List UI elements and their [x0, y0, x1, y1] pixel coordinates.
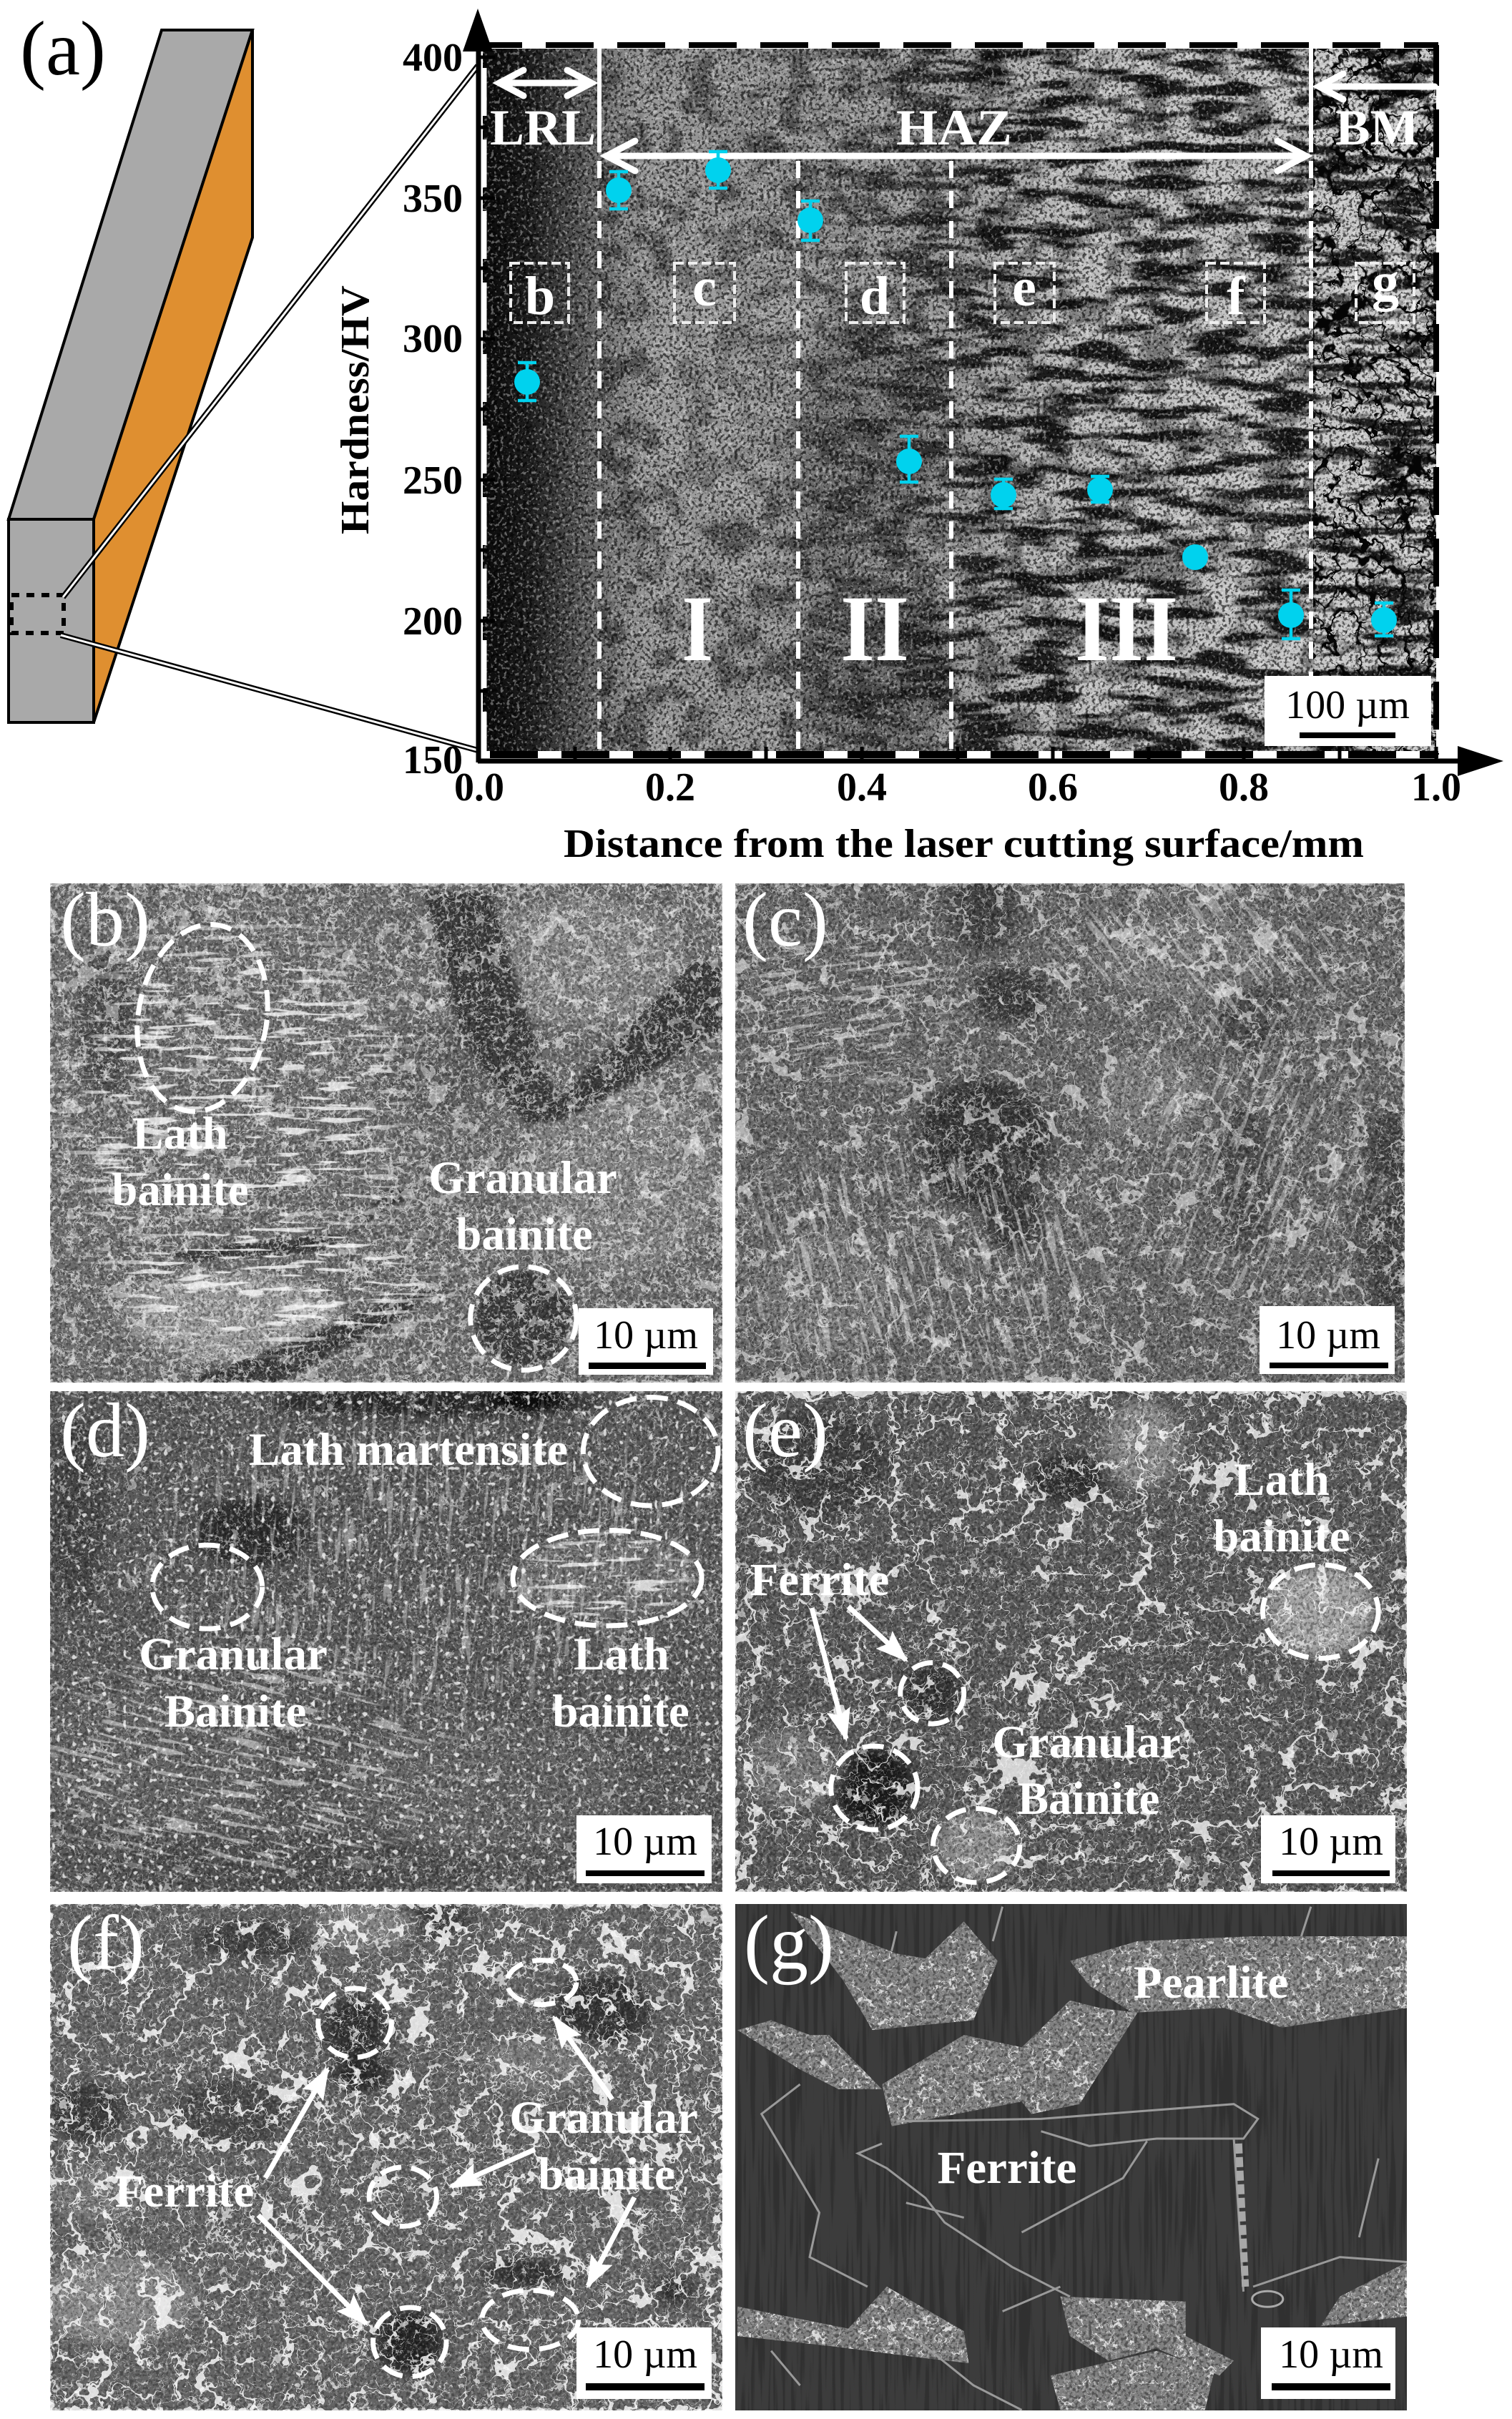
text granular bainite b: Granular	[428, 1152, 617, 1204]
dashed sample boxes: d	[860, 266, 890, 326]
text lath martensite: Lath martensite	[249, 1424, 568, 1476]
panel: hardness chart over optical micrograph	[333, 9, 1503, 866]
texture f	[39, 1901, 722, 2410]
x axis tick labels	[454, 765, 1461, 810]
texture c	[466, 557, 1512, 1578]
scale bar e: 10 µm	[1279, 1820, 1383, 1864]
dashed ellipses b	[128, 923, 576, 1370]
scale bar b	[579, 1308, 713, 1375]
dashed sample boxes: b	[525, 266, 555, 326]
y axis tick labels: 150	[403, 738, 463, 782]
text granular bainite f	[509, 2092, 698, 2200]
text granular bainite d: Granular	[139, 1629, 328, 1680]
zone dividers	[599, 49, 1311, 751]
label (d): (d)	[60, 1388, 150, 1473]
text lath bainite e	[1213, 1454, 1350, 1562]
y axis tick labels: 350	[403, 177, 463, 221]
texture g ferrite matrix	[735, 1904, 1407, 2410]
scale bar f	[576, 2327, 712, 2399]
x axis tick labels: 0.4	[837, 765, 887, 810]
dashed sample boxes: g	[1372, 252, 1399, 312]
roman numeral zones: III	[1075, 576, 1178, 681]
scale bar f: 10 µm	[593, 2332, 697, 2377]
text lath bainite d: Lath	[574, 1629, 669, 1680]
text lath bainite b	[112, 1108, 249, 1216]
x axis tick labels: 0.6	[1028, 765, 1078, 810]
text ferrite f: Ferrite	[115, 2166, 254, 2217]
x axis tick labels: 1.0	[1411, 765, 1461, 810]
label (f): (f)	[67, 1900, 144, 1986]
texture e	[735, 1391, 1407, 1892]
y axis tick labels: 200	[403, 599, 463, 644]
y axis tick labels: 300	[403, 317, 463, 361]
LRL double arrow	[499, 70, 591, 96]
grain boundaries	[762, 1907, 1408, 2410]
specimen side face	[94, 30, 252, 722]
HAZ double arrow	[607, 141, 1306, 171]
dashed ellipses e	[831, 1565, 1378, 1883]
scale bar 100 um: 100 µm	[1285, 683, 1410, 727]
zone labels	[490, 100, 1419, 156]
text granular bainite f: Granular	[509, 2092, 698, 2144]
x axis title: Distance from the laser cutting surface/mm	[564, 822, 1364, 866]
y axis tick labels: 400	[403, 36, 463, 80]
scale bar 100 um	[1265, 676, 1431, 746]
text granular bainite e: Granular	[992, 1717, 1181, 1768]
optical micrograph background	[483, 49, 1436, 758]
hardness data points	[514, 152, 1397, 639]
y axis title: Hardness/HV	[333, 285, 378, 534]
scale bar b: 10 µm	[594, 1313, 698, 1358]
y axis tick labels: 250	[403, 458, 463, 503]
zone labels: LRL	[490, 100, 596, 156]
scale bar d	[576, 1815, 712, 1883]
frame	[484, 45, 1438, 755]
scale bar d: 10 µm	[593, 1820, 697, 1864]
arrows f	[258, 2018, 634, 2324]
zone labels: BM	[1335, 100, 1419, 156]
text granular bainite d: Bainite	[165, 1686, 306, 1737]
x axis tick labels: 0.0	[454, 765, 504, 810]
text pearlite: Pearlite	[1134, 1957, 1288, 2008]
axes	[463, 9, 1503, 776]
panel g: SEM micrograph	[735, 1900, 1408, 2410]
panel a: specimen diagram	[9, 6, 478, 750]
text lath bainite d	[552, 1629, 689, 1737]
text granular bainite d	[139, 1629, 328, 1737]
label (b): (b)	[60, 878, 150, 963]
texture d	[0, 1170, 811, 2196]
y axis tick labels	[403, 36, 463, 782]
text granular bainite f: bainite	[538, 2149, 675, 2200]
scale bar c: 10 µm	[1276, 1313, 1380, 1358]
dashed sampling square	[11, 595, 64, 633]
label a: (a)	[20, 6, 106, 92]
scale bar e	[1261, 1815, 1395, 1883]
text granular bainite e: Bainite	[1018, 1773, 1159, 1825]
dashed sample boxes: c	[692, 257, 717, 318]
BM arrow	[1319, 74, 1435, 99]
zone labels: HAZ	[896, 100, 1012, 156]
dashed sample boxes: f	[1227, 266, 1246, 326]
texture b	[50, 883, 722, 1383]
scale bar g: 10 µm	[1279, 2332, 1383, 2377]
text granular bainite e	[992, 1717, 1181, 1825]
panel d: SEM micrograph	[0, 1170, 811, 2196]
scale bar c	[1260, 1306, 1395, 1374]
scale bar g	[1261, 2327, 1395, 2399]
specimen front face	[9, 519, 94, 722]
text lath bainite b: bainite	[112, 1164, 249, 1216]
text lath bainite e: Lath	[1234, 1454, 1330, 1506]
x axis tick labels: 0.8	[1219, 765, 1269, 810]
text granular bainite b: bainite	[456, 1209, 593, 1260]
panel f: SEM micrograph	[39, 1900, 722, 2410]
label (c): (c)	[742, 878, 828, 963]
text ferrite e: Ferrite	[750, 1554, 889, 1606]
text granular bainite b	[428, 1152, 617, 1260]
panel b: SEM micrograph	[50, 878, 722, 1383]
panel c: SEM micrograph	[466, 557, 1512, 1578]
zoom lines	[61, 66, 478, 750]
dashed sample boxes: e	[1012, 257, 1036, 318]
dashed sample boxes	[511, 252, 1414, 326]
pearlite colonies	[735, 1904, 1407, 2410]
text lath bainite e: bainite	[1213, 1511, 1350, 1562]
roman numeral zones: II	[840, 576, 909, 681]
text lath bainite d: bainite	[552, 1686, 689, 1737]
specimen top face	[9, 30, 252, 519]
ferrite arrows e	[812, 1606, 906, 1739]
panel e: SEM micrograph	[735, 1388, 1407, 1892]
dashed ellipses f	[318, 1961, 579, 2377]
text ferrite g: Ferrite	[938, 2142, 1076, 2194]
roman numeral zones	[682, 576, 1178, 681]
x axis tick labels: 0.2	[645, 765, 695, 810]
roman numeral zones: I	[682, 576, 713, 681]
label (e): (e)	[742, 1388, 828, 1473]
text lath bainite b: Lath	[132, 1108, 228, 1159]
dashed ellipses d	[152, 1397, 718, 1629]
label (g): (g)	[744, 1900, 834, 1986]
